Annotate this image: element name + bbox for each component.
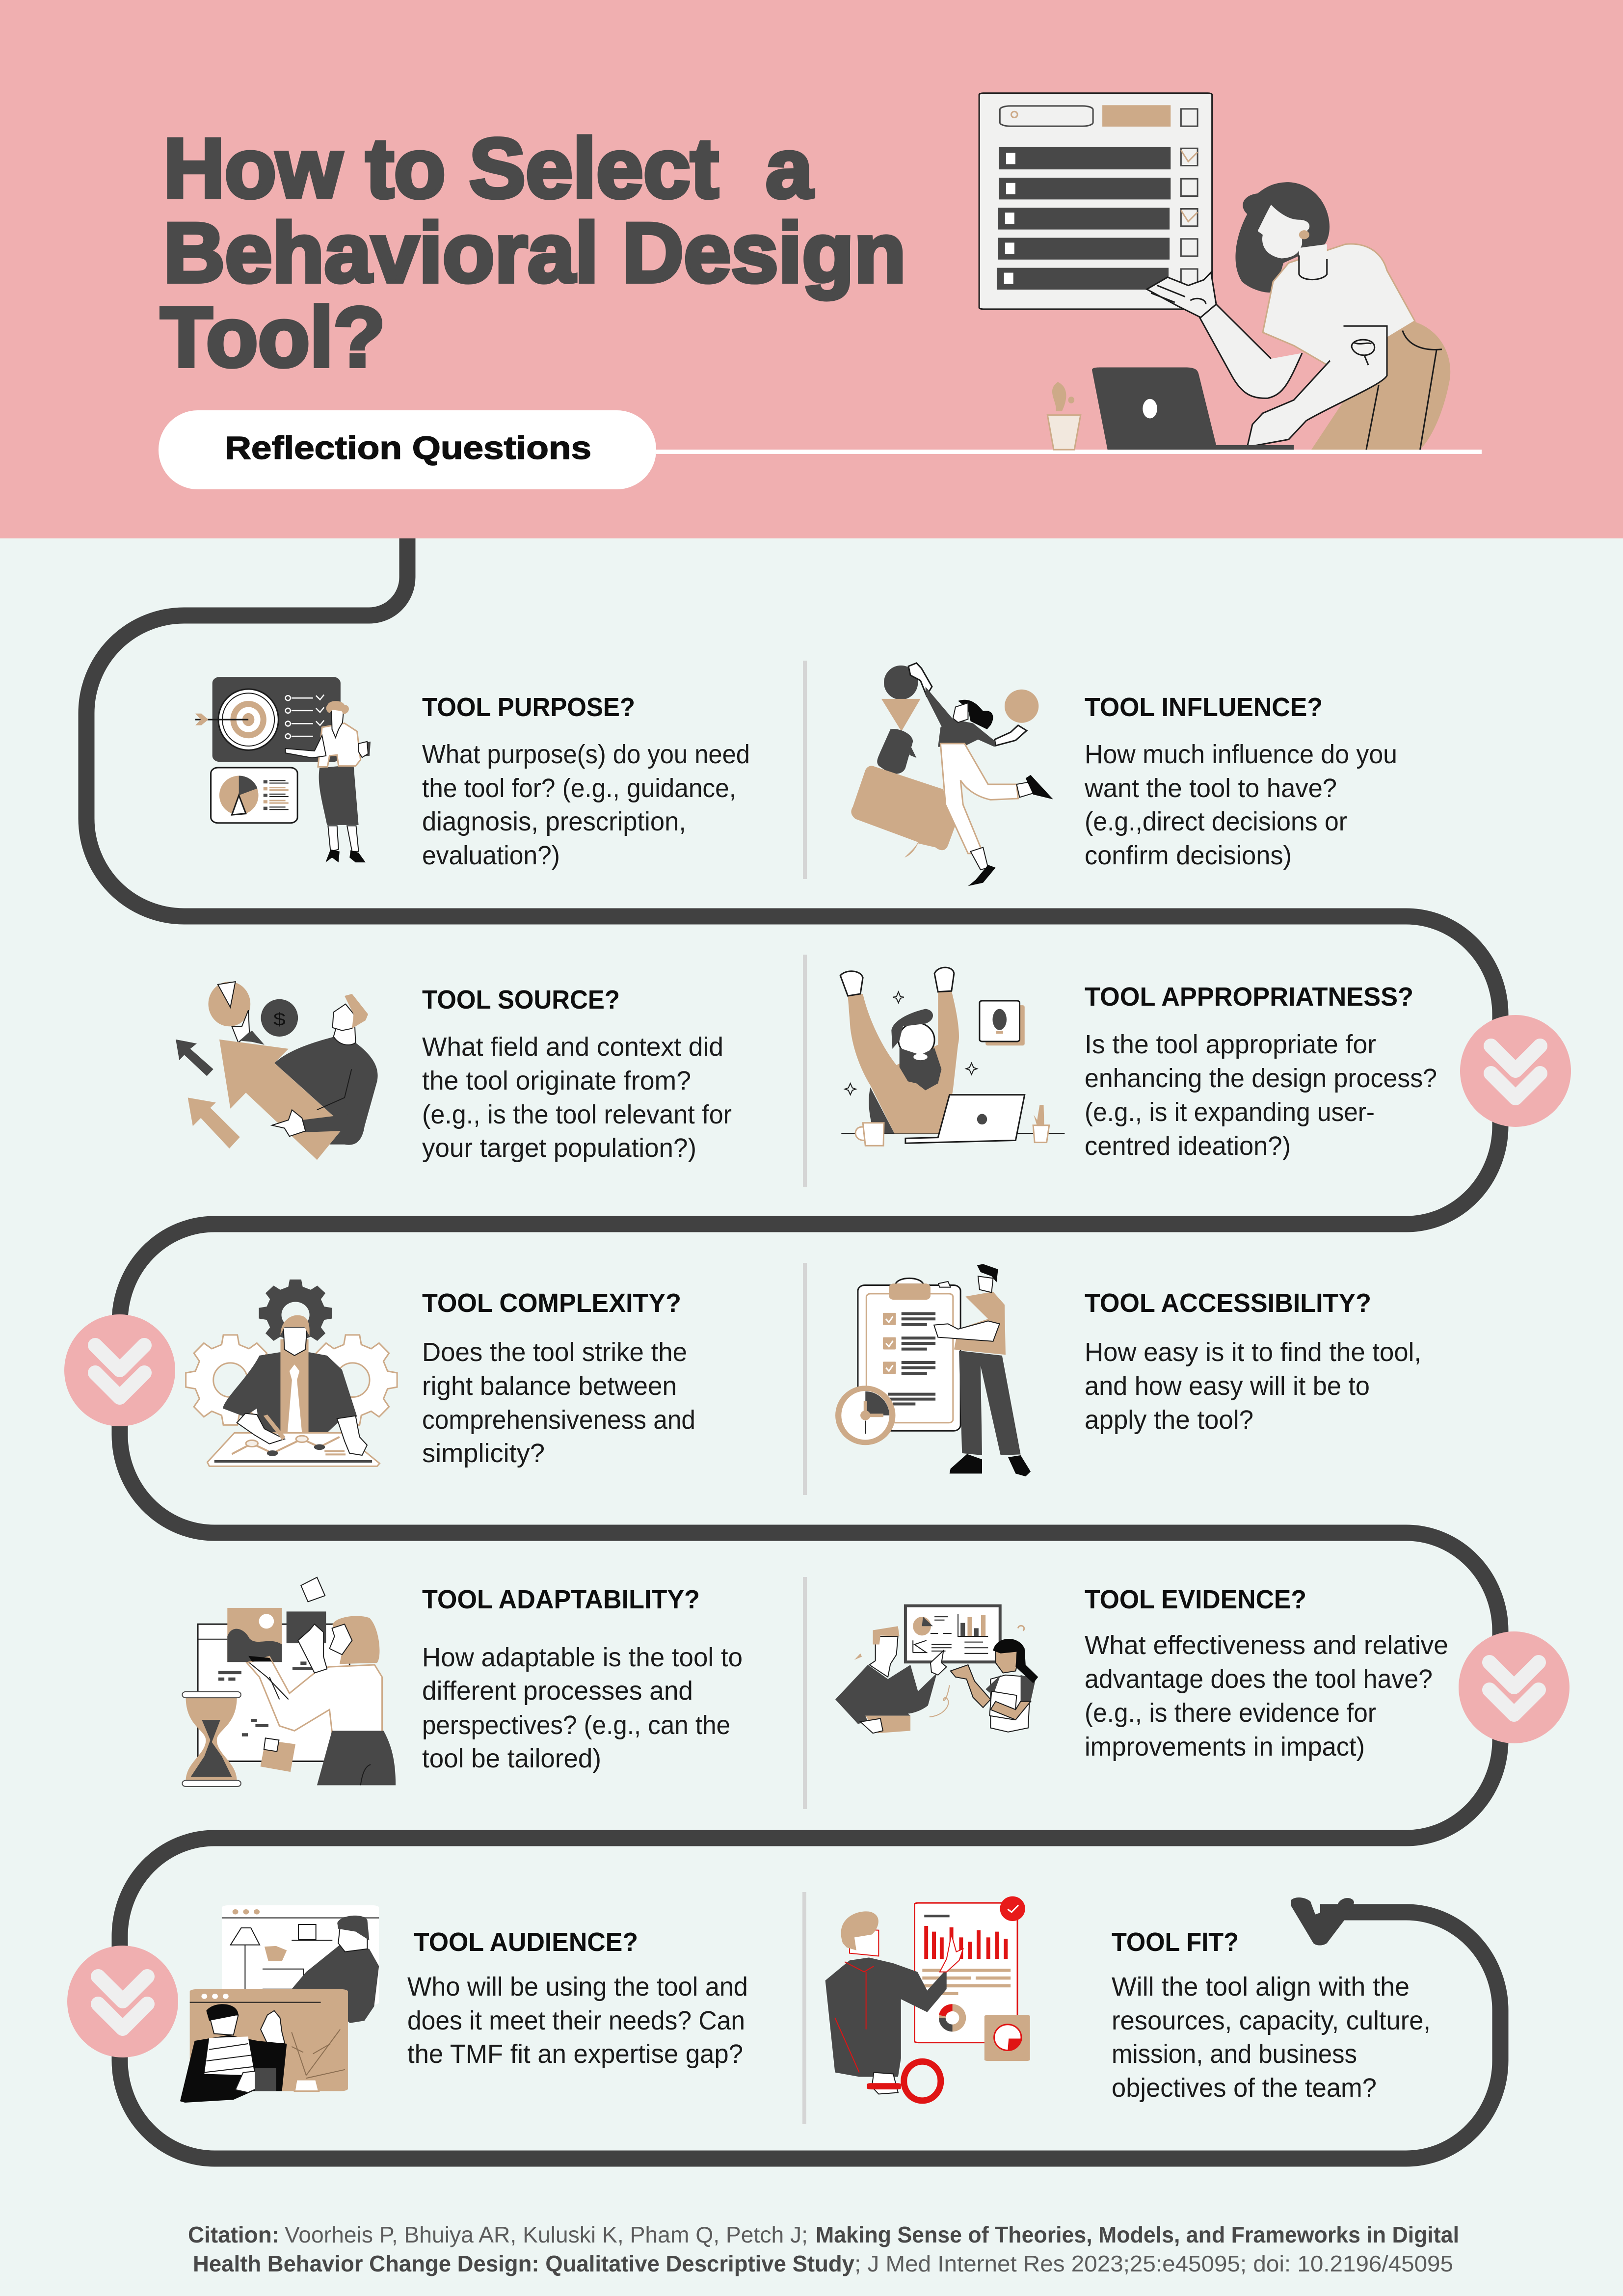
heading: TOOL PURPOSE? [422, 693, 635, 722]
badge: left upper [64, 1314, 175, 1426]
citation: Health Behavior Change Design: Qualitative Descriptive Study [193, 2251, 854, 2276]
body text [1085, 1630, 1448, 1762]
header band [0, 0, 1623, 538]
citation: Making Sense of Theories, Models, and Frameworks in Digital [816, 2222, 1459, 2247]
subtitle pill [159, 410, 656, 489]
body text: objectives of the team? [1112, 2073, 1377, 2103]
body text [422, 740, 750, 870]
heading: TOOL FIT? [1112, 1927, 1239, 1957]
heading: TOOL ACCESSIBILITY? [1085, 1288, 1371, 1318]
body text: What purpose(s) do you need [422, 740, 750, 769]
body text: resources, capacity, culture, [1112, 2006, 1431, 2035]
heading: TOOL APPROPRIATNESS? [1085, 982, 1413, 1012]
icon: man with clipboard and clock [835, 1264, 1031, 1476]
arrow head [1291, 1897, 1354, 1946]
body text: confirm decisions) [1085, 841, 1292, 870]
body text [1112, 1972, 1431, 2103]
body text: perspectives? (e.g., can the [422, 1710, 730, 1740]
panel: tool audience [180, 1905, 748, 2103]
body text: does it meet their needs? Can [407, 2006, 745, 2035]
body text [407, 1972, 748, 2069]
body text: Will the tool align with the [1112, 1972, 1410, 2002]
icon: woman arranging a board with hourglass [182, 1577, 396, 1787]
badge: left lower [67, 1946, 178, 2057]
panel: tool purpose [195, 677, 750, 870]
icon: woman balancing shapes [851, 663, 1053, 886]
panel: tool accessibility [835, 1264, 1421, 1476]
body text: What field and context did [422, 1032, 723, 1062]
icon: man analysing a red chart with magnifier [825, 1896, 1030, 2101]
body text: tool be tailored) [422, 1744, 601, 1773]
heading: TOOL AUDIENCE? [414, 1927, 638, 1957]
panel: tool source [176, 982, 732, 1163]
icon: man carrying large arrow [176, 982, 378, 1160]
title [160, 121, 906, 384]
panel: tool complexity [186, 1280, 695, 1468]
body text: How easy is it to find the tool, [1085, 1337, 1421, 1367]
body text: apply the tool? [1085, 1405, 1253, 1435]
illustration: woman with checklist panel and laptop [979, 93, 1450, 450]
body text: How adaptable is the tool to [422, 1643, 743, 1672]
body text: centred ideation?) [1085, 1131, 1291, 1161]
body text: the tool for? (e.g., guidance, [422, 774, 736, 803]
body text: want the tool to have? [1084, 774, 1337, 803]
heading: TOOL COMPLEXITY? [422, 1288, 681, 1318]
body text [422, 1032, 732, 1163]
body text: the TMF fit an expertise gap? [407, 2039, 743, 2069]
body text: improvements in impact) [1085, 1732, 1365, 1762]
panel: tool fit [825, 1896, 1431, 2103]
title: Behavioral Design [163, 206, 906, 300]
body text: (e.g., is it expanding user- [1085, 1097, 1375, 1127]
body text: your target population?) [422, 1133, 696, 1163]
icon: woman presenting target board [195, 677, 371, 862]
icon: man working in front of gears [186, 1280, 397, 1466]
icon: bearded man celebrating at laptop [840, 967, 1064, 1146]
body text: How much influence do you [1085, 740, 1397, 769]
body text: diagnosis, prescription, [422, 807, 686, 836]
body text [1085, 1030, 1437, 1161]
panel: tool evidence [835, 1585, 1448, 1762]
column dividers [802, 661, 807, 2124]
heading: TOOL SOURCE? [422, 985, 620, 1015]
body text [1085, 1337, 1421, 1435]
body text [422, 1337, 695, 1468]
body text: (e.g.,direct decisions or [1085, 807, 1347, 836]
body text: different processes and [422, 1676, 693, 1706]
icon: two users in browser windows [180, 1905, 379, 2103]
icon: two people discussing a chart [835, 1606, 1038, 1733]
desk line [656, 450, 1482, 454]
icon: man carrying large arrow: $ [273, 1009, 286, 1029]
panel: tool influence [851, 663, 1397, 886]
body text: comprehensiveness and [422, 1405, 695, 1435]
body text: advantage does the tool have? [1085, 1664, 1433, 1694]
body text [422, 1643, 743, 1773]
heading: TOOL EVIDENCE? [1085, 1585, 1306, 1614]
body text: enhancing the design process? [1085, 1064, 1437, 1093]
badge: right lower [1459, 1631, 1570, 1743]
subtitle pill: Reflection Questions [225, 429, 591, 466]
body text: the tool originate from? [422, 1066, 691, 1095]
citation: Voorheis P, Bhuiya AR, Kuluski K, Pham Q, Petch J; [285, 2222, 808, 2247]
body text: What effectiveness and relative [1085, 1630, 1448, 1660]
body text: simplicity? [422, 1439, 545, 1468]
panel: tool adaptability [182, 1577, 743, 1787]
heading: TOOL INFLUENCE? [1085, 693, 1323, 722]
body text [1084, 740, 1397, 870]
body text: Is the tool appropriate for [1085, 1030, 1376, 1059]
body text: mission, and business [1112, 2039, 1357, 2069]
body text: (e.g., is there evidence for [1085, 1698, 1376, 1728]
panel: tool appropriatness [840, 967, 1437, 1161]
winding path [86, 538, 1500, 2159]
citation [188, 2222, 1459, 2276]
title: How to Select a [163, 121, 813, 215]
body text: and how easy will it be to [1085, 1371, 1370, 1401]
body text: evaluation?) [422, 841, 560, 870]
citation: ; J Med Internet Res 2023;25:e45095; doi: 10.2196/45095 [854, 2251, 1453, 2276]
body text: Who will be using the tool and [407, 1972, 748, 2002]
body text: Does the tool strike the [422, 1337, 687, 1367]
heading: TOOL ADAPTABILITY? [422, 1585, 700, 1614]
body text: (e.g., is the tool relevant for [422, 1100, 732, 1129]
body text: right balance between [422, 1371, 677, 1401]
citation: Citation: [188, 2222, 279, 2247]
badge: right upper [1460, 1015, 1571, 1127]
title: Tool? [160, 290, 385, 384]
